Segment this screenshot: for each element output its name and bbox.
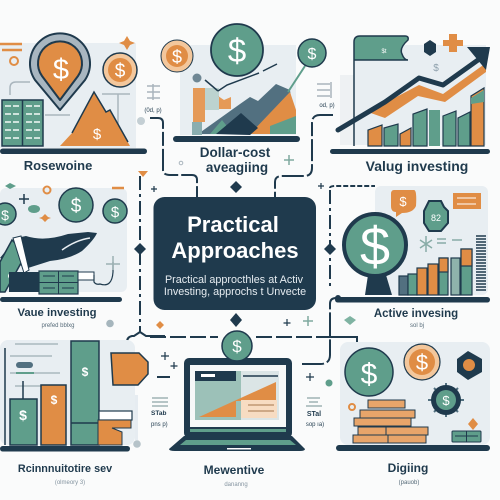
icon: orange coin: $ (416, 350, 428, 375)
heading: Practical (187, 212, 279, 237)
icon: large dollar lens: $ (360, 217, 390, 277)
base bar (173, 136, 300, 142)
icon: gear coin (428, 383, 464, 417)
small label: STal right: sop ıa) (306, 422, 324, 428)
icon: teal coin: $ (361, 358, 378, 391)
icon: orange mountain: $ (93, 126, 102, 143)
small label: STal left (151, 398, 168, 428)
small label: STal right: STal (307, 411, 321, 418)
decorative orange dashes and ring (0, 44, 22, 65)
heading: Approaches (171, 238, 299, 263)
caption: (pauob) (399, 480, 419, 486)
flag tab: $t (381, 49, 387, 55)
flag tab (354, 36, 408, 146)
icon: map pin with dollar: $ (53, 54, 69, 86)
icon: cash note (452, 431, 481, 442)
icon: orange speech coin (391, 190, 416, 217)
icon: teal coin right (103, 199, 127, 223)
heading: Rcinnnuitotire sev: Rcinnnuitotire sev (18, 463, 112, 475)
icon: orange coin (404, 344, 440, 380)
icon: small orange coin (161, 40, 193, 72)
icon: cash stack (9, 256, 120, 294)
axis (4, 348, 6, 445)
heading: Vaue investing: Vaue investing (17, 307, 97, 319)
small label: left of dollar-cost (144, 84, 162, 114)
icon: small teal coin: $ (308, 46, 317, 63)
icon: teal coin left: $ (1, 207, 9, 223)
small marks (420, 236, 462, 252)
laptop screen right (241, 371, 279, 420)
icon: large dollar lens (344, 214, 406, 295)
caption: prefed bblxg (41, 323, 75, 329)
base bar (330, 149, 490, 154)
barcode (476, 236, 486, 290)
icon: teal coin on laptop (222, 331, 252, 361)
icon: teal coin left (0, 203, 16, 225)
heading: Valug investing: Valug investing (366, 158, 468, 174)
icon: teal watch badge: 82 (431, 213, 441, 223)
icon: small orange coin: $ (172, 47, 182, 67)
icon: coin stacks (353, 400, 428, 443)
panel: Active investing (335, 186, 490, 329)
icon: large teal coin (211, 24, 263, 76)
panel: Rosewoine (0, 33, 147, 173)
icon: map pin with dollar (30, 33, 90, 110)
icon: orange diamond (468, 418, 478, 430)
icon: teal building grid (2, 100, 43, 146)
bar chart (10, 341, 99, 445)
base bar (0, 148, 147, 154)
connectors (113, 115, 375, 412)
icon: orange coin: $ (115, 61, 126, 82)
panel: bottom left bars (0, 340, 148, 486)
panel: laptop Mewentive (169, 331, 305, 488)
subtitle: Investing, approchs t Unvecte (164, 286, 306, 298)
icon: teal coin center: $ (71, 196, 82, 217)
small label: right of dollar-cost: od, p) (319, 103, 335, 109)
icon: orange coin (103, 53, 137, 87)
panel: Dollar-cost averaging (161, 24, 326, 175)
arrow: rising trend (338, 47, 490, 130)
icon: teal coin center (59, 188, 93, 222)
icon: hexagon badge (457, 351, 482, 380)
heading: Dollar-cost averaging: Dollar-cost (200, 145, 271, 160)
panel: Digiing (336, 342, 490, 486)
icon: teal coin right: $ (111, 204, 120, 221)
icon: teal coin (345, 348, 393, 396)
panel: bottom left bars: $ (19, 407, 27, 423)
icon: small teal coin (288, 39, 326, 92)
central panel: Practical Approaches (154, 197, 316, 310)
heading: Digiing: Digiing (388, 461, 428, 475)
small label: left of dollar-cost: (0d, p) (144, 108, 162, 114)
icon: gear coin: $ (442, 393, 450, 408)
icon: teal watch badge (424, 201, 448, 231)
icon: open hand (0, 232, 97, 292)
caption: (olmeory 3) (55, 480, 85, 486)
decorative sparkles and dots (135, 75, 356, 440)
small label: STal right (306, 380, 332, 428)
bar chart (368, 88, 484, 146)
heading: Dollar-cost averaging: aveagiing (206, 160, 268, 175)
icon: orange speech coin: $ (399, 194, 407, 209)
small label: STal left: STab (151, 410, 166, 417)
laptop screen left (195, 371, 241, 420)
panel: bottom left bars: $ (82, 365, 89, 379)
small label: right of dollar-cost (317, 82, 335, 109)
orange note (453, 193, 481, 209)
base bar (0, 297, 122, 302)
panel: Value investing left (0, 183, 127, 329)
icon: orange tag (111, 353, 148, 385)
connector diamonds (134, 181, 341, 327)
caption: dananng (224, 482, 248, 488)
subtitle: Practical approcthles at Activ (165, 274, 304, 286)
icon: dark badge (424, 40, 436, 56)
small dollar: $ (433, 63, 439, 74)
base bar (0, 446, 130, 452)
icon: orange stacked block (98, 411, 132, 445)
icon: orange spark (119, 36, 135, 50)
small arrows (10, 344, 60, 386)
caption: sol bj (410, 323, 424, 329)
icon: large teal coin: $ (228, 32, 246, 69)
mountain chart (192, 64, 296, 135)
icon: laptop (169, 358, 305, 451)
heading: Active invesing: Active invesing (374, 308, 458, 320)
chart lines (10, 82, 130, 135)
icon: teal coin on laptop: $ (232, 337, 242, 356)
base bar (335, 297, 490, 302)
base bar (336, 445, 490, 451)
small label: STal left: pns p) (151, 422, 168, 428)
orange trend band (368, 63, 486, 118)
heading: Mewentive: Mewentive (204, 463, 265, 477)
icon: small marks (5, 183, 124, 222)
panel: Value investing top right (330, 34, 490, 174)
icon: orange cross (443, 34, 463, 52)
panel: bottom left bars: $ (51, 393, 58, 407)
bar chart (399, 249, 472, 295)
heading: Rosewoine: Rosewoine (24, 158, 92, 173)
icon: orange mountain (60, 92, 130, 146)
